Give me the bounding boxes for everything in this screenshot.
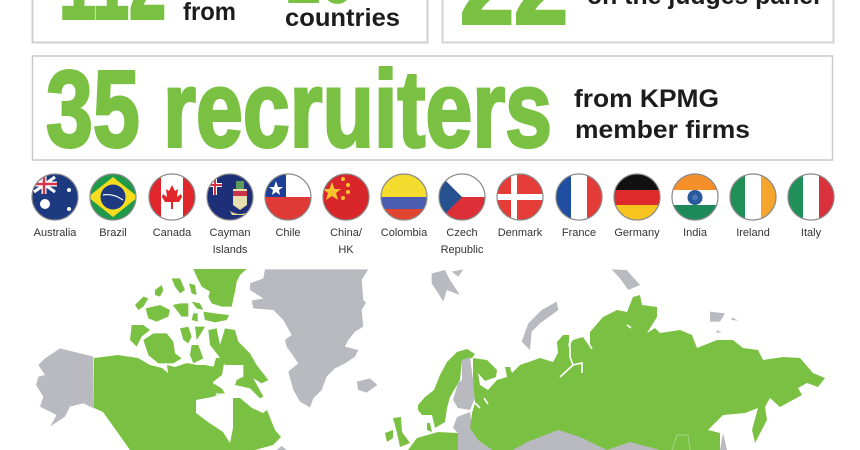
- map: grey countries of the west: [36, 269, 377, 450]
- China border outline: [672, 435, 690, 450]
- Denmark: [427, 423, 432, 432]
- Ireland: [385, 430, 393, 442]
- flag: Brazil: Brazil: [99, 227, 127, 239]
- flag: Canada: [149, 174, 195, 239]
- United Kingdom: [393, 417, 410, 447]
- flag: India: India: [683, 227, 708, 239]
- flag: Ireland: [730, 174, 776, 239]
- flag: Australia: Australia: [34, 227, 77, 239]
- Canadian Arctic islands: [130, 269, 257, 372]
- flag: Canada: Canada: [153, 227, 192, 239]
- flag: Chile: [265, 174, 311, 239]
- panel: recruiters: [32, 48, 832, 170]
- flag: Germany: [614, 174, 660, 239]
- flag: India: [672, 174, 718, 239]
- Iceland: [357, 378, 377, 393]
- flag row: [32, 174, 834, 256]
- Arctic grey islands: [432, 269, 738, 350]
- flag: Brazil: [88, 174, 138, 239]
- Baltics and Poland area grey: [453, 412, 492, 450]
- flag: Colombia: [381, 174, 428, 239]
- Netherlands patch: [410, 444, 422, 450]
- flag: Ireland: Ireland: [736, 227, 770, 239]
- flag: Cayman Islands: Cayman: [210, 227, 250, 239]
- Greenland: [250, 269, 368, 407]
- flag: Czech Republic: [439, 174, 485, 256]
- flag: Denmark: [497, 174, 543, 239]
- Southampton Island: [213, 383, 225, 393]
- Russia: [470, 295, 825, 450]
- flag: China/HK: China/: [330, 227, 363, 239]
- Novaya Zemlya: [522, 302, 558, 350]
- flag: France: [556, 174, 602, 239]
- panel: judges: [442, 0, 834, 48]
- northeast United States: [277, 446, 287, 450]
- Kazakhstan and Mongolia: [513, 430, 727, 450]
- Norway and Sweden: [418, 349, 475, 428]
- flag: Denmark: Denmark: [498, 227, 543, 239]
- Arctic inlets of Russia: [475, 325, 631, 408]
- flag: Germany: Germany: [614, 227, 660, 239]
- text: from KPMG member firms: from KPMG: [574, 85, 719, 113]
- flag: China/HK: [323, 174, 369, 256]
- Canada mainland: [94, 355, 281, 450]
- continental Europe: [408, 432, 458, 450]
- flag: China/HK: HK: [338, 244, 354, 256]
- flag: Colombia: Colombia: [381, 227, 428, 239]
- world map: [36, 269, 825, 450]
- Finland: [453, 357, 475, 410]
- flag: Australia: [32, 174, 78, 239]
- flag: Czech Republic: Czech: [446, 227, 478, 239]
- Svalbard: [432, 269, 463, 302]
- Franz Josef Land: [612, 269, 640, 290]
- text: countries: countries: [285, 4, 400, 32]
- flag: Italy: Italy: [801, 227, 822, 239]
- flag: Cayman Islands: [207, 174, 253, 256]
- New Siberian Islands: [710, 312, 738, 333]
- flag: Chile: Chile: [275, 227, 301, 239]
- flag: France: France: [562, 227, 596, 239]
- flag: Cayman Islands: Islands: [213, 244, 248, 256]
- flag: Czech Republic: Republic: [441, 244, 484, 256]
- panel: entrants and countries: [32, 0, 428, 42]
- big headline 35 recruiters: 35 recruiters: [46, 48, 552, 170]
- Alaska: [36, 348, 94, 427]
- text: from KPMG member firms: member firms: [575, 116, 750, 144]
- flag: Italy: [788, 174, 834, 239]
- text: from KPMG member firms: [574, 85, 750, 144]
- Baffin Island: [213, 350, 268, 398]
